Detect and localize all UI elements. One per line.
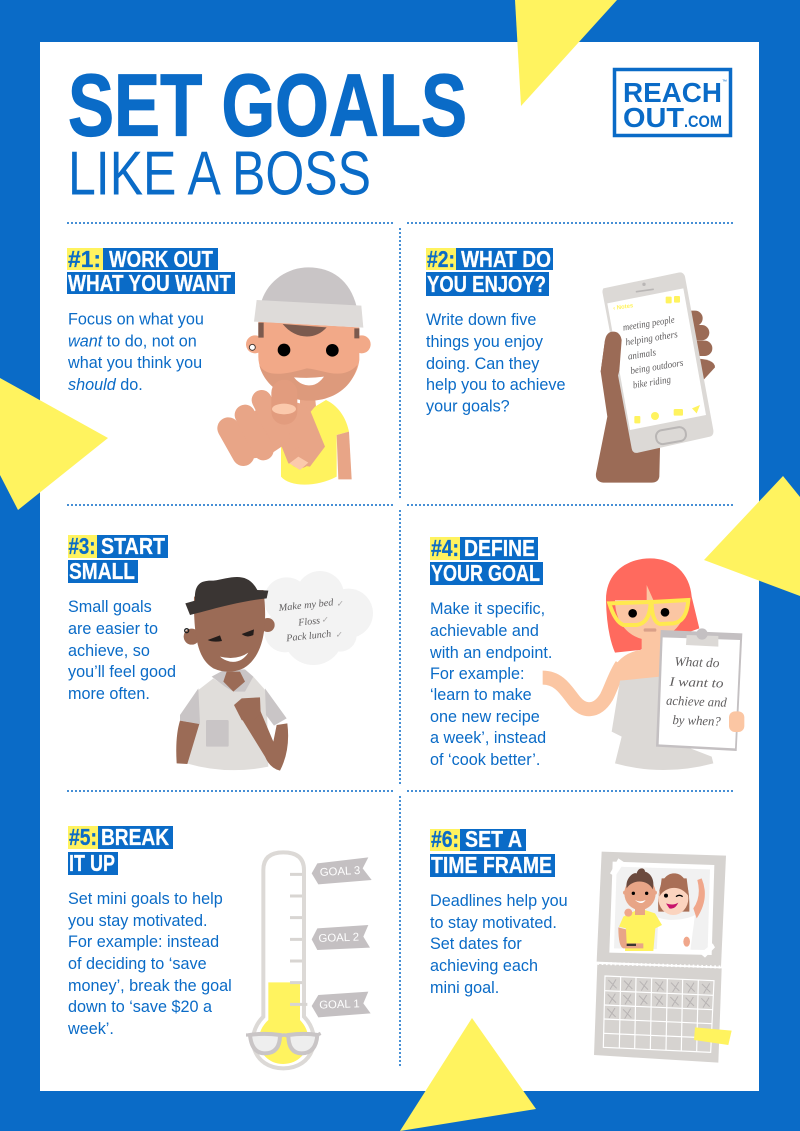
heading: step 4: DEFINE	[464, 535, 535, 561]
heading: step 2: WHAT DO	[461, 246, 551, 272]
illustration: calendar with photo	[594, 852, 732, 1063]
text block: step 2: things you enjoy	[426, 333, 544, 351]
illustration: woman with clipboard	[543, 558, 744, 770]
text block: step 4: achievable and	[430, 622, 539, 640]
text block: step 2: your goals?	[426, 398, 510, 416]
thought cloud: ✓	[337, 600, 344, 610]
text block: step 3: achieve, so	[68, 642, 150, 660]
text block: step 5: of deciding to ‘save	[68, 955, 207, 973]
heading: step 1: #1:	[68, 246, 101, 272]
goal 2 banner	[312, 925, 370, 950]
title: SET GOALS	[68, 56, 467, 154]
thought cloud: ✓	[336, 630, 343, 640]
heading: step 1: WHAT YOU WANT	[68, 270, 231, 296]
text block: step 2: doing. Can they	[426, 355, 540, 373]
clipboard: by when?	[672, 712, 722, 729]
logo: ReachOut.com: OUT	[623, 102, 684, 133]
illustration: man thinking of small goals	[176, 571, 373, 771]
heading: step 5	[68, 824, 173, 876]
title: LIKE A BOSS	[68, 140, 371, 208]
yellow triangle: right	[704, 476, 800, 596]
thought cloud: Pack lunch	[285, 629, 332, 644]
text block: step 5: money’, break the goal	[68, 977, 232, 995]
goal 2 banner: GOAL 2	[318, 932, 359, 945]
text block: step 4: with an endpoint.	[429, 644, 552, 662]
text block: step 3: Small goals	[68, 598, 152, 616]
goal 1 banner: GOAL 1	[319, 998, 360, 1012]
text block: step 4: one new recipe	[430, 708, 540, 726]
text block: step 1: what you think you	[67, 354, 202, 372]
illustration: hand holding phone: helping others	[625, 329, 679, 348]
text block: step 4: of ‘cook better’.	[430, 751, 540, 769]
thought cloud	[264, 571, 373, 665]
text block: step 4: a week’, instead	[430, 729, 546, 747]
text block: step 3: more often.	[68, 685, 150, 703]
illustration: hand holding phone: meeting people	[622, 315, 676, 334]
logo: ReachOut.com: ™	[722, 79, 727, 85]
text block: step 6: Set dates for	[430, 935, 522, 953]
photo: two friends	[618, 868, 705, 953]
heading: step 6: TIME FRAME	[431, 852, 552, 878]
heading: step 3: START	[101, 533, 165, 559]
text block: step 4: Make it specific,	[430, 600, 545, 618]
text block: step 5: For example: instead	[68, 933, 219, 951]
text block: step 5: down to ‘save $20 a	[68, 998, 212, 1016]
goal 3 banner: GOAL 3	[320, 865, 361, 879]
text block: step 1: want to do, not on	[68, 332, 197, 350]
calendar grid	[603, 976, 714, 1052]
illustration: hand holding phone: animals	[627, 347, 657, 363]
yellow sticky tape	[694, 1027, 732, 1045]
heading: step 6: #6:	[431, 826, 459, 852]
thought cloud: ✓	[322, 616, 329, 626]
heading: step 5: BREAK	[101, 824, 169, 850]
heading: step 2: YOU ENJOY?	[427, 271, 546, 297]
illustration: thermometer with goals	[246, 852, 372, 1068]
logo: ReachOut.com	[614, 70, 730, 136]
goal 1 banner	[312, 992, 371, 1017]
title	[68, 56, 467, 208]
text block: step 4: For example:	[430, 665, 524, 683]
text block: step 2: Write down five	[426, 311, 536, 329]
heading: step 2	[426, 246, 553, 297]
panel: step 4	[429, 535, 744, 770]
logo: ReachOut.com: REACH	[623, 77, 722, 108]
heading: step 3	[68, 533, 168, 584]
text block: step 5: Set mini goals to help	[68, 890, 223, 908]
heading: step 5: #5:	[69, 824, 97, 850]
heading: step 4	[430, 535, 543, 586]
text block: step 6: to stay motivated.	[430, 914, 557, 932]
clipboard: achieve and	[666, 693, 728, 710]
text block: step 4: ‘learn to make	[430, 686, 532, 704]
heading: step 3: SMALL	[69, 558, 135, 584]
yellow triangle: left	[0, 378, 108, 510]
text block: step 1: Focus on what you	[68, 310, 204, 328]
heading: step 6: SET A	[465, 826, 522, 852]
logo: ReachOut.com: .COM	[684, 112, 722, 131]
heading: step 4: #4:	[431, 535, 459, 561]
illustration: hand holding phone: bike riding	[632, 374, 672, 391]
text block: step 5: you stay motivated.	[68, 912, 207, 930]
clipboard: What do	[674, 654, 720, 670]
illustration: man pointing	[228, 267, 371, 485]
text block: step 3: you’ll feel good	[68, 663, 176, 681]
panel: step 5	[67, 824, 372, 1068]
text block: step 6: achieving each	[430, 957, 538, 975]
text block: step 6: Deadlines help you	[430, 892, 568, 910]
text block: step 2: help you to achieve	[426, 376, 566, 394]
heading: step 4: YOUR GOAL	[431, 560, 540, 586]
heading: step 6	[430, 826, 555, 878]
heading: step 3: #3:	[68, 533, 96, 559]
panel: step 2	[426, 246, 715, 483]
thought cloud: Make my bed	[277, 597, 335, 614]
clipboard: I want to	[668, 674, 724, 691]
illustration: hand holding phone: being outdoors	[630, 358, 684, 377]
heading: step 2: #2:	[427, 246, 455, 272]
text block: step 5: week’.	[67, 1020, 114, 1038]
heading: step 1: WORK OUT	[109, 246, 213, 272]
illustration: hand holding phone: ‹ Notes	[613, 303, 634, 312]
text block: step 1: should do.	[68, 376, 143, 394]
panel: step 1	[67, 246, 371, 485]
heading: step 5: IT UP	[69, 850, 115, 876]
thought cloud: Floss	[297, 615, 321, 629]
text block: step 6: mini goal.	[430, 979, 499, 997]
goal 3 banner	[312, 857, 372, 884]
text block: step 3: are easier to	[68, 620, 158, 638]
clipboard	[656, 628, 742, 751]
yellow triangle: bottom	[400, 1018, 536, 1131]
panel: step 3	[68, 533, 373, 771]
illustration: hand holding phone	[596, 272, 715, 483]
panel: step 6	[430, 826, 732, 1063]
yellow triangle: top	[515, 0, 617, 106]
heading: step 1	[67, 246, 235, 296]
